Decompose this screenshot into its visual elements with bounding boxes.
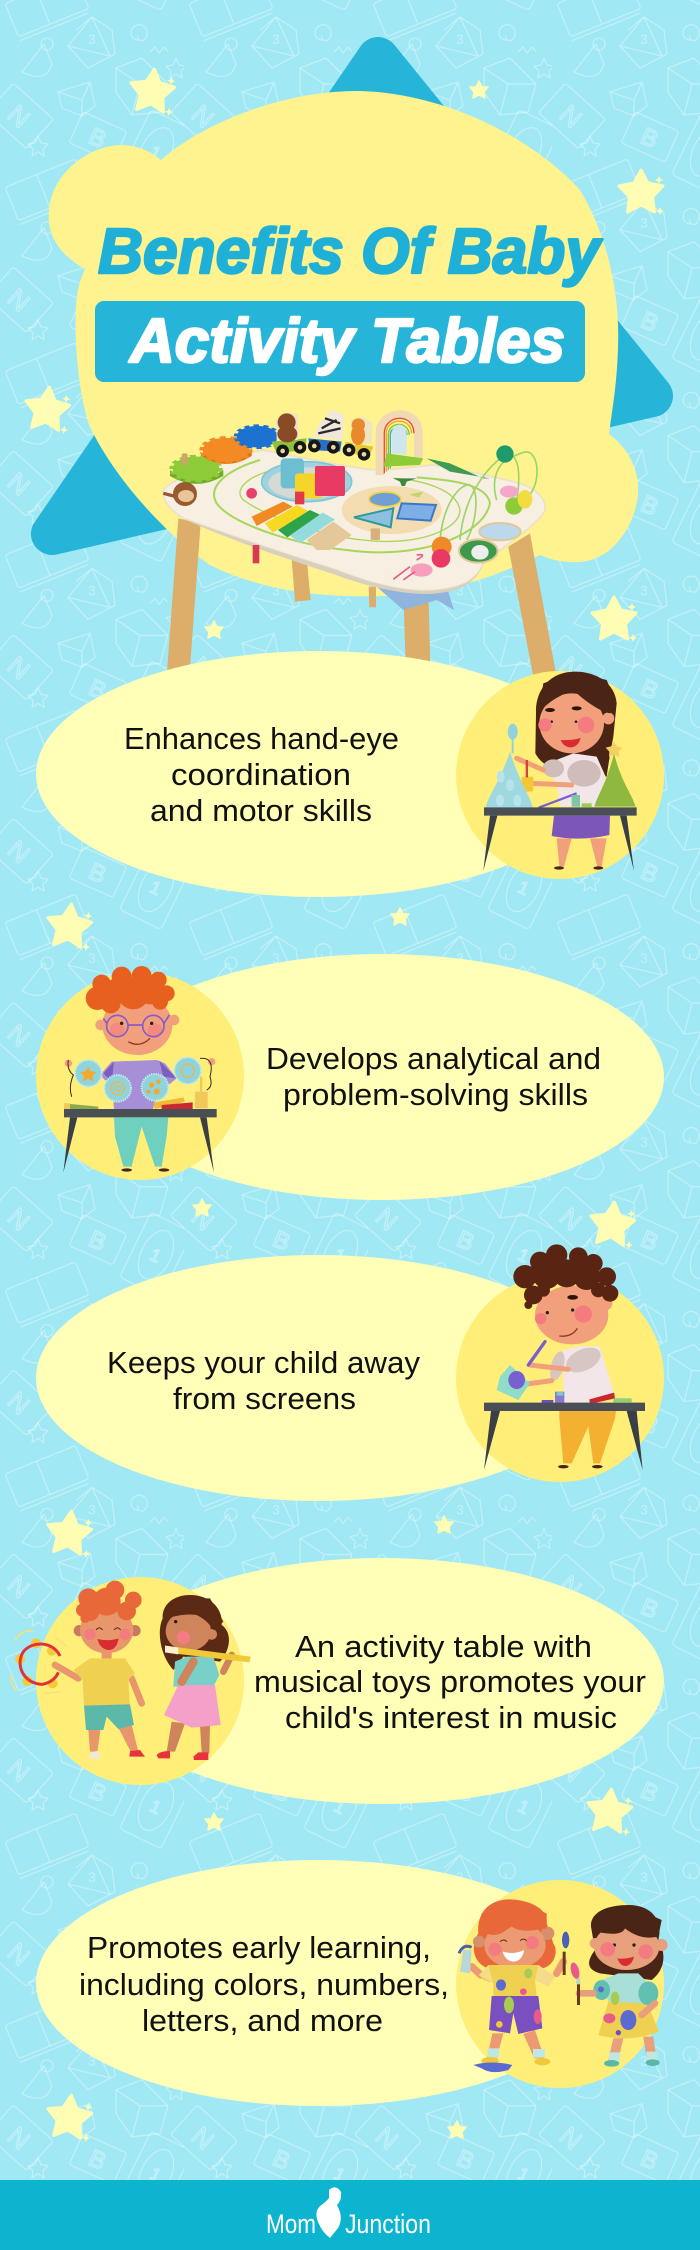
benefit 1: text: coordination [171, 758, 351, 792]
table legs [167, 518, 557, 677]
benefit 2: text [266, 1042, 601, 1112]
benefit 5: girl with dark hair [569, 1905, 668, 2067]
shape sorter [342, 486, 442, 534]
benefit 2: ellipse [36, 954, 664, 1200]
benefit 1: girl crafting [483, 672, 637, 871]
monkey decal [163, 482, 197, 506]
benefit 2: circle backdrop [36, 972, 244, 1180]
benefit 1: text [124, 722, 399, 828]
benefit 1: ellipse [36, 651, 664, 897]
benefit 5: text: letters, and more [142, 2004, 383, 2038]
benefit 1: text: Enhances hand-eye [124, 722, 399, 756]
table top [163, 450, 545, 591]
benefit 4: text: musical toys promotes your [254, 1665, 646, 1699]
benefit 4: boy with tambourine [11, 1581, 145, 1758]
benefit 4: girl with flute [157, 1595, 251, 1760]
benefit 1: circle backdrop [456, 671, 664, 879]
benefit 5: text: including colors, numbers, [79, 1968, 449, 2002]
benefit 4: ellipse [11, 1558, 664, 1804]
xylophone [252, 502, 352, 550]
hanging cloth [377, 587, 454, 610]
benefit 4: circle backdrop [36, 1577, 244, 1785]
benefit 5: ellipse [36, 1860, 668, 2106]
benefit 2: text: Develops analytical and [266, 1042, 601, 1076]
activity table illustration [163, 410, 557, 677]
crocodile [427, 458, 490, 478]
center bowl [262, 462, 352, 502]
stacking blocks [281, 458, 304, 488]
benefit 3: ellipse [36, 1244, 664, 1501]
benefit 5: circle backdrop [456, 1880, 664, 2088]
benefit 2: boy holding discs [63, 966, 217, 1173]
footer logo: Junction [345, 2209, 431, 2239]
footer bar [0, 2180, 700, 2250]
gears [170, 470, 223, 484]
benefit 3: boy painting [484, 1244, 645, 1470]
bead maze wires [440, 452, 537, 540]
benefit 5: text: Promotes early learning, [87, 1931, 431, 1965]
benefit 3: text: from screens [173, 1382, 356, 1416]
decorative teal triangle [52, 58, 652, 534]
title line 1: Benefits Of Baby [98, 215, 603, 287]
zebra disc [459, 523, 521, 563]
green track [214, 460, 490, 552]
footer logo [266, 2187, 431, 2239]
benefit 4: text: child's interest in music [285, 1701, 617, 1735]
train with animals [272, 410, 373, 461]
title banner: Activity Tables [128, 307, 565, 376]
yellow title blob [49, 91, 638, 596]
benefit 3: text [107, 1346, 421, 1416]
benefit 5: girl with red hair [459, 1899, 569, 2072]
benefit 5: text [79, 1931, 449, 2038]
benefit 4: text: An activity table with [295, 1630, 592, 1664]
benefit 3: circle backdrop [456, 1274, 664, 1482]
benefit 1: text: and motor skills [150, 794, 372, 828]
benefit 4: text [254, 1630, 646, 1735]
rainbow arch [380, 415, 418, 475]
footer logo: Mom [266, 2209, 316, 2239]
flamingo decal [393, 555, 433, 580]
benefit 3: text: Keeps your child away [107, 1346, 421, 1380]
benefit 2: text: problem-solving skills [283, 1078, 588, 1112]
palm [393, 478, 417, 486]
